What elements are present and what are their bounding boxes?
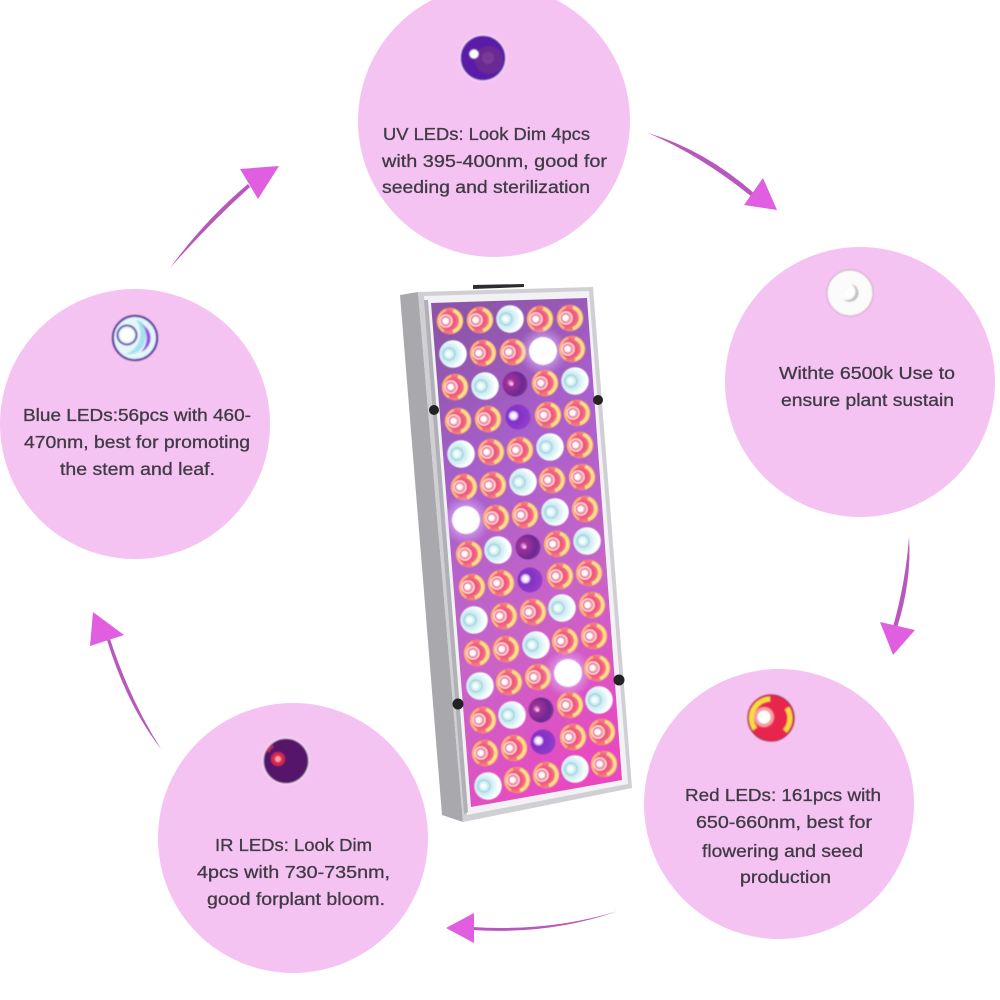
- circle: UV LEDs: [358, 0, 630, 257]
- arrow: red to IR: [446, 911, 618, 943]
- text: Blue LEDs description: [23, 405, 251, 479]
- text: White LEDs description: ensure plant sustain: [781, 390, 954, 410]
- arrow: UV to white: [648, 133, 777, 210]
- circle: White LEDs: [725, 247, 995, 517]
- arrow: IR to blue: [90, 612, 161, 749]
- text: UV LEDs description: [381, 124, 607, 197]
- text: Blue LEDs description: the stem and leaf.: [60, 459, 215, 479]
- text: IR LEDs description: [197, 835, 390, 909]
- text: Red LEDs description: production: [740, 867, 831, 887]
- icon: blue LED: [113, 316, 157, 360]
- circle: IR LEDs: [158, 703, 428, 973]
- icon: IR LED: [263, 738, 309, 784]
- text: IR LEDs description: 4pcs with 730-735nm,: [197, 862, 390, 882]
- icon: red LED: [748, 695, 794, 741]
- text: Blue LEDs description: 470nm, best for promoting: [24, 432, 250, 452]
- icon: white LED: [827, 270, 873, 316]
- text: Red LEDs description: Red LEDs: 161pcs with: [685, 785, 881, 805]
- text: IR LEDs description: good forplant bloom.: [207, 889, 385, 909]
- LED array: [437, 305, 617, 800]
- circle: Blue LEDs: [0, 289, 270, 559]
- arrow: blue to UV: [170, 166, 279, 268]
- text: UV LEDs description: UV LEDs: Look Dim 4pcs: [383, 124, 590, 144]
- icon: UV LED: [460, 35, 506, 81]
- LED grow light panel: [400, 284, 632, 822]
- text: Red LEDs description: flowering and seed: [702, 841, 863, 861]
- arrow: white to red: [880, 537, 915, 655]
- circle: Red LEDs: [644, 669, 914, 939]
- text: IR LEDs description: IR LEDs: Look Dim: [215, 835, 372, 855]
- text: UV LEDs description: with 395-400nm, good for: [381, 151, 607, 171]
- text: Blue LEDs description: Blue LEDs:56pcs with 460-: [23, 405, 251, 425]
- text: White LEDs description: Withte 6500k Use to: [779, 363, 955, 383]
- text: Red LEDs description: [685, 785, 881, 887]
- text: White LEDs description: [779, 363, 955, 410]
- text: UV LEDs description: seeding and sterilization: [382, 177, 590, 197]
- text: Red LEDs description: 650-660nm, best for: [696, 812, 872, 832]
